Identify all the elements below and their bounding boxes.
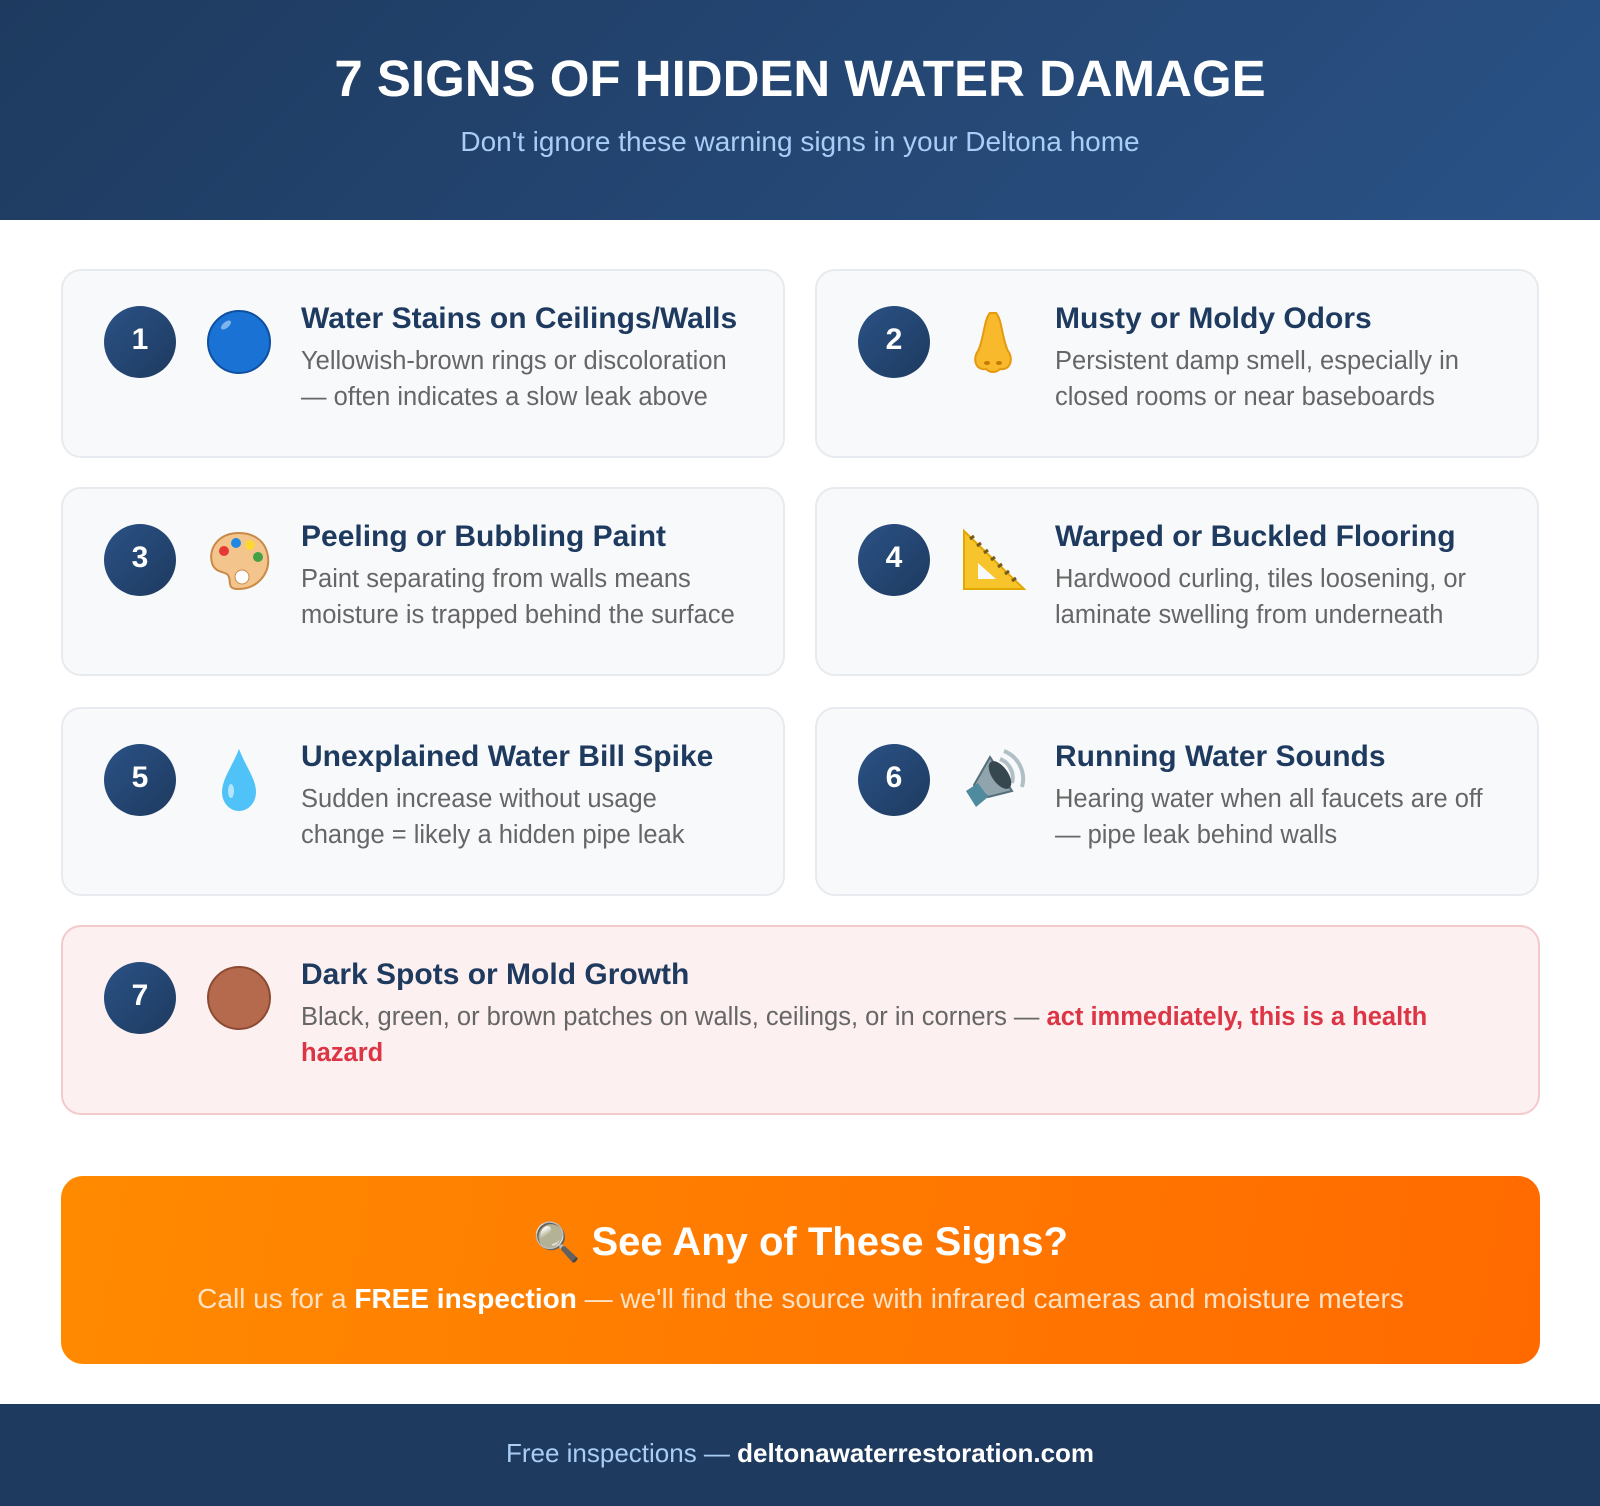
text: sign 2: Musty or Moldy Odors	[1055, 302, 1372, 335]
text: sign 7: Black, green, or brown patches on walls, ceilings, or in corners — act immediately, this is a health hazard	[301, 1003, 1427, 1067]
badge 6	[858, 744, 930, 816]
icon: blue circle	[207, 310, 271, 374]
badge 2	[858, 306, 930, 378]
text: sign 4: Warped or Buckled Flooring	[1055, 520, 1456, 553]
icon: palette	[210, 532, 270, 590]
text: sign 5: Sudden increase without usage change = likely a hidden pipe leak	[301, 785, 684, 849]
title: 7 SIGNS OF HIDDEN WATER DAMAGE	[334, 50, 1266, 107]
badge 7: 7	[132, 979, 148, 1012]
text: sign 7: Dark Spots or Mold Growth	[301, 958, 689, 991]
text: sign 1	[301, 302, 737, 411]
icon: nose	[974, 312, 1012, 373]
footer	[0, 1404, 1600, 1506]
panel: sign 3	[61, 487, 785, 676]
subtitle: Don't ignore these warning signs in your Deltona home	[460, 126, 1140, 157]
text: sign 6	[1055, 740, 1483, 849]
text: sign 4: Hardwood curling, tiles loosening, or laminate swelling from underneath	[1055, 565, 1466, 629]
badge 1	[104, 306, 176, 378]
text: sign 1: Yellowish-brown rings or discoloration — often indicates a slow leak above	[301, 347, 727, 411]
icon: water drop	[222, 749, 256, 811]
panel: sign 4	[815, 487, 1539, 676]
text: sign 2: Persistent damp smell, especially in closed rooms or near baseboards	[1055, 347, 1459, 411]
panel: sign 7 (warning)	[61, 925, 1540, 1115]
CTA heading: 🔍 See Any of These Signs?	[533, 1220, 1068, 1264]
badge 6: 6	[886, 761, 902, 794]
badge 3: 3	[132, 541, 148, 574]
icon: brown circle	[207, 966, 271, 1030]
panel: sign 5	[61, 707, 785, 896]
text: sign 5	[301, 740, 713, 849]
icon: speaker	[966, 749, 1026, 807]
header	[0, 0, 1600, 220]
footer text: Free inspections — deltonawaterrestoration.com	[506, 1438, 1094, 1468]
panel: sign 2	[815, 269, 1539, 458]
icon: triangular ruler	[963, 528, 1026, 590]
badge 1: 1	[132, 323, 148, 356]
text: sign 3: Paint separating from walls means moisture is trapped behind the surface	[301, 565, 735, 629]
text: sign 2	[1055, 302, 1459, 411]
text: sign 4	[1055, 520, 1466, 629]
badge 4: 4	[886, 541, 902, 574]
panel: sign 6	[815, 707, 1539, 896]
badge 2: 2	[886, 323, 902, 356]
text: sign 5: Unexplained Water Bill Spike	[301, 740, 713, 773]
text: sign 1: Water Stains on Ceilings/Walls	[301, 302, 737, 335]
panel: sign 1	[61, 269, 785, 458]
text: sign 3	[301, 520, 735, 629]
badge 7	[104, 962, 176, 1034]
badge 5	[104, 744, 176, 816]
text: sign 3: Peeling or Bubbling Paint	[301, 520, 666, 553]
badge 3	[104, 524, 176, 596]
text: sign 6: Running Water Sounds	[1055, 740, 1386, 773]
text: sign 6: Hearing water when all faucets are off — pipe leak behind walls	[1055, 785, 1483, 849]
callout: CTA	[61, 1176, 1540, 1364]
CTA text: Call us for a FREE inspection — we'll find the source with infrared cameras and moisture meters	[197, 1283, 1404, 1314]
text: sign 7	[301, 958, 1427, 1067]
badge 4	[858, 524, 930, 596]
badge 5: 5	[132, 761, 148, 794]
